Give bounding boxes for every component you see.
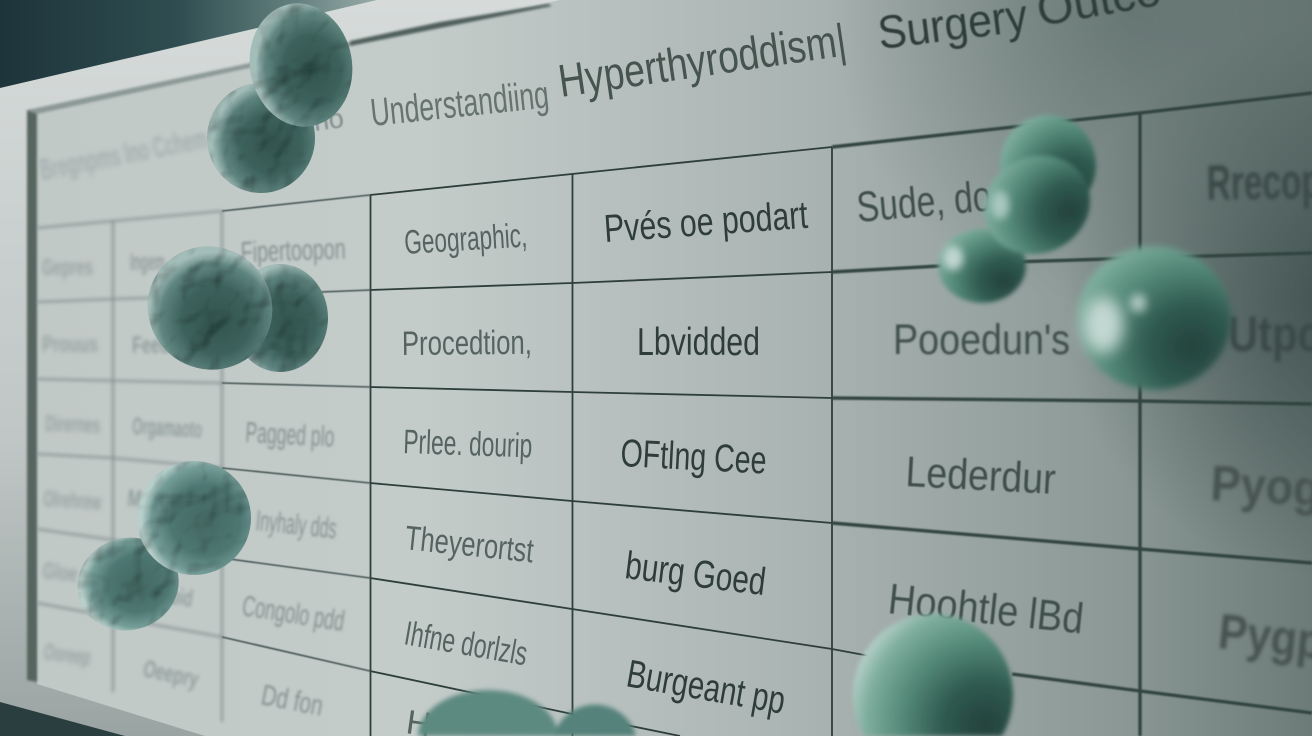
column 1 text: Olrehrew — [43, 485, 102, 515]
column 5 text — [603, 194, 809, 723]
column 1 text — [41, 254, 102, 670]
column 2 text: Orgamaoto — [132, 413, 203, 444]
column 1 text: Prouus — [42, 331, 98, 357]
cell cluster: lower left — [67, 461, 251, 642]
table header blurred: Bregnpms Ino Cchem — [37, 122, 210, 187]
column 2 text: Ingem — [130, 249, 165, 276]
table header blurred: no — [312, 102, 346, 137]
cell: large right blurred — [1077, 246, 1231, 390]
column 3 text: Congolo pdd — [240, 590, 347, 638]
column 3 text: Inyhaly dds — [254, 505, 338, 545]
column 4 text: Theyerortst — [403, 519, 536, 570]
column 3 text: Dd fon — [259, 679, 326, 723]
title: Hyperthyroddism| — [555, 14, 849, 107]
table grid: right blurred columns — [832, 93, 1312, 736]
column 2 text — [126, 249, 203, 694]
column 4 text: Procedtion, — [402, 324, 532, 363]
column 2 text: M — [126, 485, 143, 513]
column 6 text: Sude, do — [855, 172, 993, 232]
cell cluster: top left — [207, 0, 362, 193]
column 2 text: Oeepry — [141, 655, 202, 694]
column 3 text — [240, 233, 347, 723]
frame inner shadow — [27, 4, 552, 682]
table grid: middle columns — [222, 195, 370, 671]
column 1 text: Ooreep — [42, 638, 92, 670]
column 4 text: Ihfne dorlzls — [402, 614, 530, 673]
column 5 text: Pvés oe podart — [603, 194, 809, 251]
column 5 text: burg Goed — [623, 544, 768, 604]
column 4 text — [402, 217, 536, 736]
column 5 text: Burgeant pp — [623, 653, 788, 723]
column 5 text: OFtlng Cee — [620, 432, 768, 483]
column 4 text: Prlee. dourip — [403, 423, 533, 465]
column 1 text: Gepres — [42, 254, 93, 280]
title — [368, 0, 1165, 135]
column 3 text: Pagged plo — [245, 417, 335, 454]
dark floor strip — [0, 700, 130, 736]
table grid: far left blurred columns — [37, 211, 222, 722]
column 6 text: Hoohtle lBd — [886, 575, 1086, 643]
column 3 text: Fipertoopon — [240, 233, 346, 269]
column 4 text: Geographic, — [403, 217, 528, 262]
title: Understandiing — [368, 73, 551, 135]
background room — [0, 0, 394, 100]
column 1 text: Dirernes — [45, 410, 101, 438]
cell cluster: bottom centre blurred — [418, 690, 636, 736]
table grid: central sharp columns — [370, 147, 875, 736]
column 6 text: Lederdur — [904, 448, 1057, 504]
column 5 text: Lbvidded — [637, 321, 760, 364]
cell cluster: middle left — [123, 222, 328, 394]
cell: bottom right blurred — [853, 614, 1013, 736]
column 6 text: Pooedun's — [893, 316, 1070, 364]
column 2 text: Feed — [132, 332, 170, 359]
column 1 text: Gloe — [41, 557, 79, 587]
column 6 text — [855, 172, 1086, 643]
cell cluster: upper right blurred — [938, 115, 1106, 303]
column 2 text: Ibid — [164, 582, 195, 613]
column 7 text — [1206, 153, 1312, 670]
